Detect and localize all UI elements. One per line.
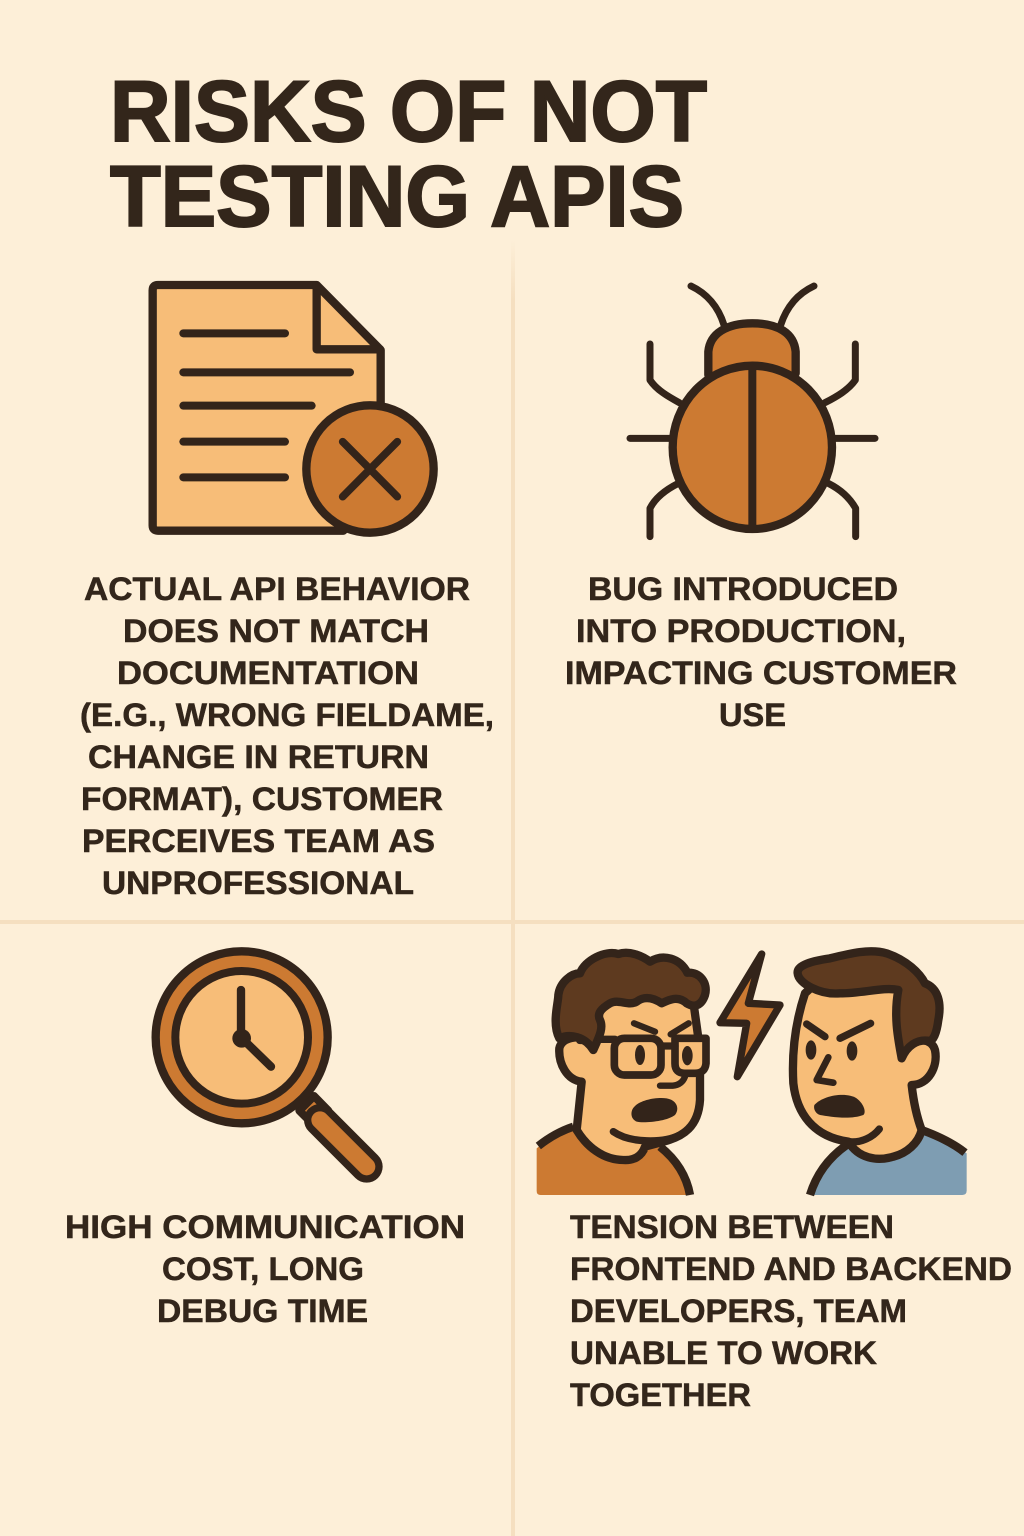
panel: debug time	[65, 951, 465, 1329]
title: TESTING APIS	[110, 149, 684, 245]
text: team tension: UNABLE TO WORK	[570, 1335, 877, 1371]
text: documentation mismatch: ACTUAL API BEHAVIOR	[84, 571, 470, 607]
icon: magnifier with clock	[156, 951, 367, 1167]
text: production bug	[565, 571, 957, 733]
text: documentation mismatch: (E.G., WRONG FIELDAME,	[80, 697, 494, 733]
icon: document with error mark	[153, 285, 434, 533]
icon: bug	[630, 286, 875, 537]
text: production bug: USE	[719, 697, 786, 733]
text: documentation mismatch: PERCEIVES TEAM AS	[82, 823, 435, 859]
icon: lightning bolt	[720, 954, 780, 1077]
icon: right developer	[793, 951, 967, 1195]
panel: documentation mismatch	[80, 285, 494, 901]
panel: team tension	[537, 951, 1012, 1413]
text: documentation mismatch: DOES NOT MATCH	[123, 613, 429, 649]
text: debug time: HIGH COMMUNICATION	[65, 1209, 465, 1245]
text: team tension	[570, 1209, 1012, 1413]
icon: left developer	[537, 953, 706, 1195]
text: team tension: DEVELOPERS, TEAM	[570, 1293, 907, 1329]
text: debug time: COST, LONG	[162, 1251, 364, 1287]
text: team tension: TOGETHER	[570, 1377, 751, 1413]
text: debug time	[65, 1209, 465, 1329]
text: documentation mismatch: UNPROFESSIONAL	[102, 865, 414, 901]
text: documentation mismatch: DOCUMENTATION	[117, 655, 419, 691]
panel: production bug	[565, 286, 957, 733]
text: team tension: FRONTEND AND BACKEND	[570, 1251, 1012, 1287]
text: documentation mismatch: FORMAT), CUSTOMER	[81, 781, 443, 817]
text: production bug: INTO PRODUCTION,	[576, 613, 906, 649]
icon: arguing developers	[537, 951, 967, 1195]
text: team tension: TENSION BETWEEN	[570, 1209, 894, 1245]
title	[110, 64, 707, 245]
text: debug time: DEBUG TIME	[157, 1293, 368, 1329]
text: documentation mismatch: CHANGE IN RETURN	[88, 739, 429, 775]
title: RISKS OF NOT	[110, 64, 707, 160]
text: production bug: IMPACTING CUSTOMER	[565, 655, 957, 691]
text: production bug: BUG INTRODUCED	[588, 571, 898, 607]
text: documentation mismatch	[80, 571, 494, 901]
